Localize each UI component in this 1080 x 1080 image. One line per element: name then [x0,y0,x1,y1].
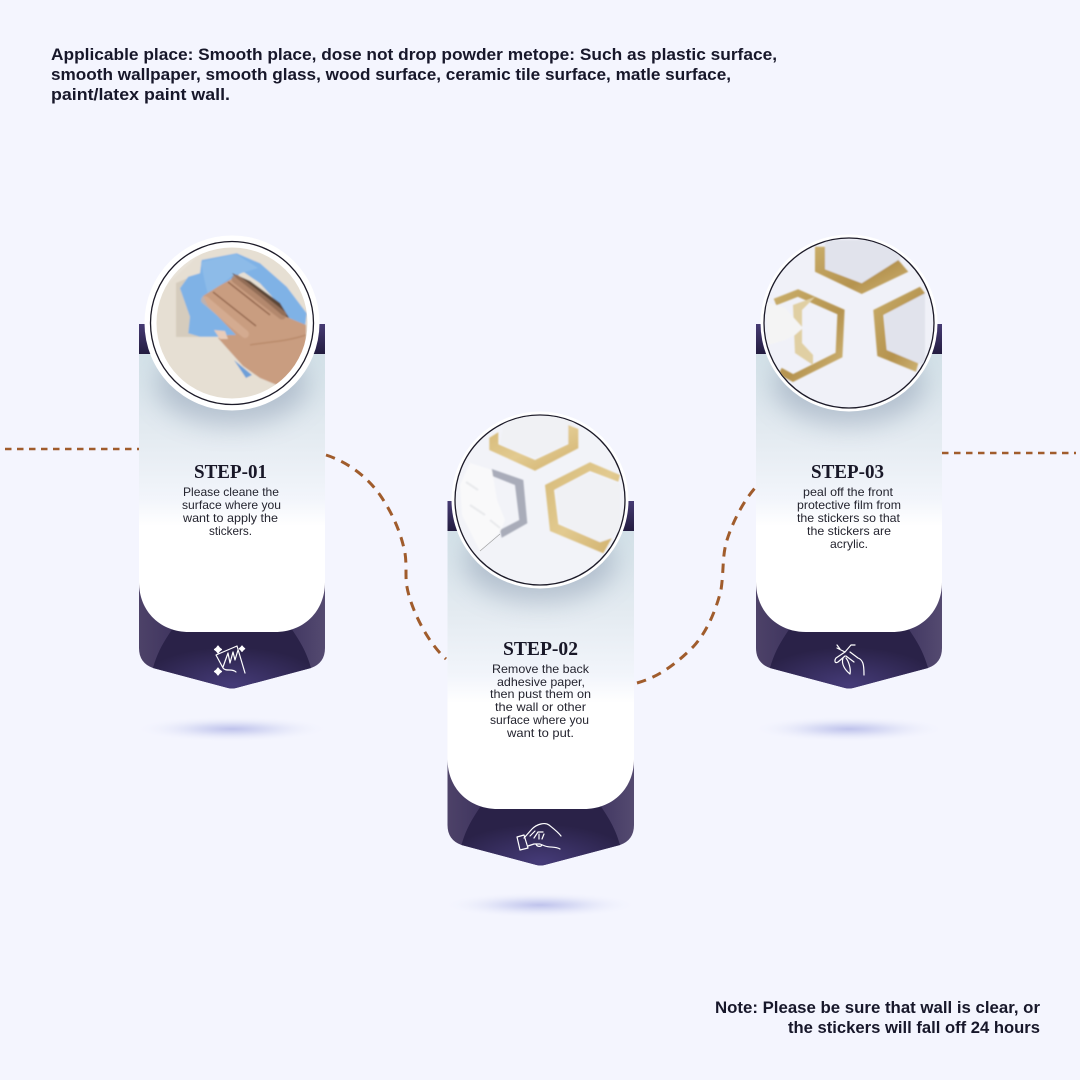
card base [448,501,634,866]
photo circle: peeling front film [760,234,938,412]
panel: step 2 card [448,412,634,866]
paper body [756,354,942,632]
step description: Please cleane the [183,485,279,499]
circle shadow [773,345,925,425]
icon: fingers peeling film [835,645,864,675]
note text: Note: Please be sure that wall is clear, or [715,998,1040,1017]
panel: step 3 card [756,234,942,688]
step title: STEP-02 [503,638,578,660]
step description: want to apply the [182,511,278,525]
step title: STEP-03 [811,461,884,483]
dashed connector: step 1 to step 2 [326,455,446,659]
floor shadow: step 3 [751,716,947,742]
dashed connector: step 3 to right edge [942,452,1076,454]
step description: stickers. [209,524,252,538]
step description: peal off the front [803,485,894,499]
step description [490,662,591,740]
icon: hand wiping [214,646,245,675]
step description: protective film from [797,498,901,512]
base inner arc [153,625,311,688]
step description [797,485,901,551]
intro text: applicable places: paint/latex paint wall. [51,85,230,104]
note text [715,998,1040,1037]
paper body [139,354,325,632]
top strip [448,501,634,532]
step description: the stickers so that [797,511,901,525]
base inner arc [770,625,928,688]
step description: surface where you [182,498,281,512]
step description: acrylic. [830,537,868,551]
step description: adhesive paper, [497,675,585,689]
step description: the wall or other [495,700,586,714]
intro text: applicable places: Applicable place: Smooth place, dose not drop powder metope: Such as plastic surface, [51,45,777,64]
card base [756,324,942,688]
photo circle: removing backing paper [452,412,628,588]
step description: the stickers are [807,524,891,538]
floor shadow: step 1 [134,716,330,742]
step description: want to put. [506,726,574,740]
panel: step 1 card [139,236,325,688]
dashed connector: step 2 to step 3 [637,488,755,683]
base inner arc [462,802,620,866]
icon: hand pressing sticker [517,824,561,850]
top strip [139,324,325,355]
step description: surface where you [490,713,589,727]
step description [182,485,281,538]
intro text: applicable places [51,45,777,104]
note text: the stickers will fall off 24 hours [788,1018,1040,1037]
step description: then pust them on [490,687,591,701]
step description: Remove the back [492,662,589,676]
floor shadow: step 2 [442,892,638,918]
dashed connector: left edge to step 1 [5,448,139,450]
photo circle: hand wiping wall [144,236,320,410]
top strip [756,324,942,355]
circle shadow [156,345,308,425]
step title: STEP-01 [194,461,267,483]
paper body [448,531,634,809]
card base [139,324,325,688]
intro text: applicable places: smooth wallpaper, smooth glass, wood surface, ceramic tile surface, matle surface, [51,65,731,84]
circle shadow [464,522,616,602]
